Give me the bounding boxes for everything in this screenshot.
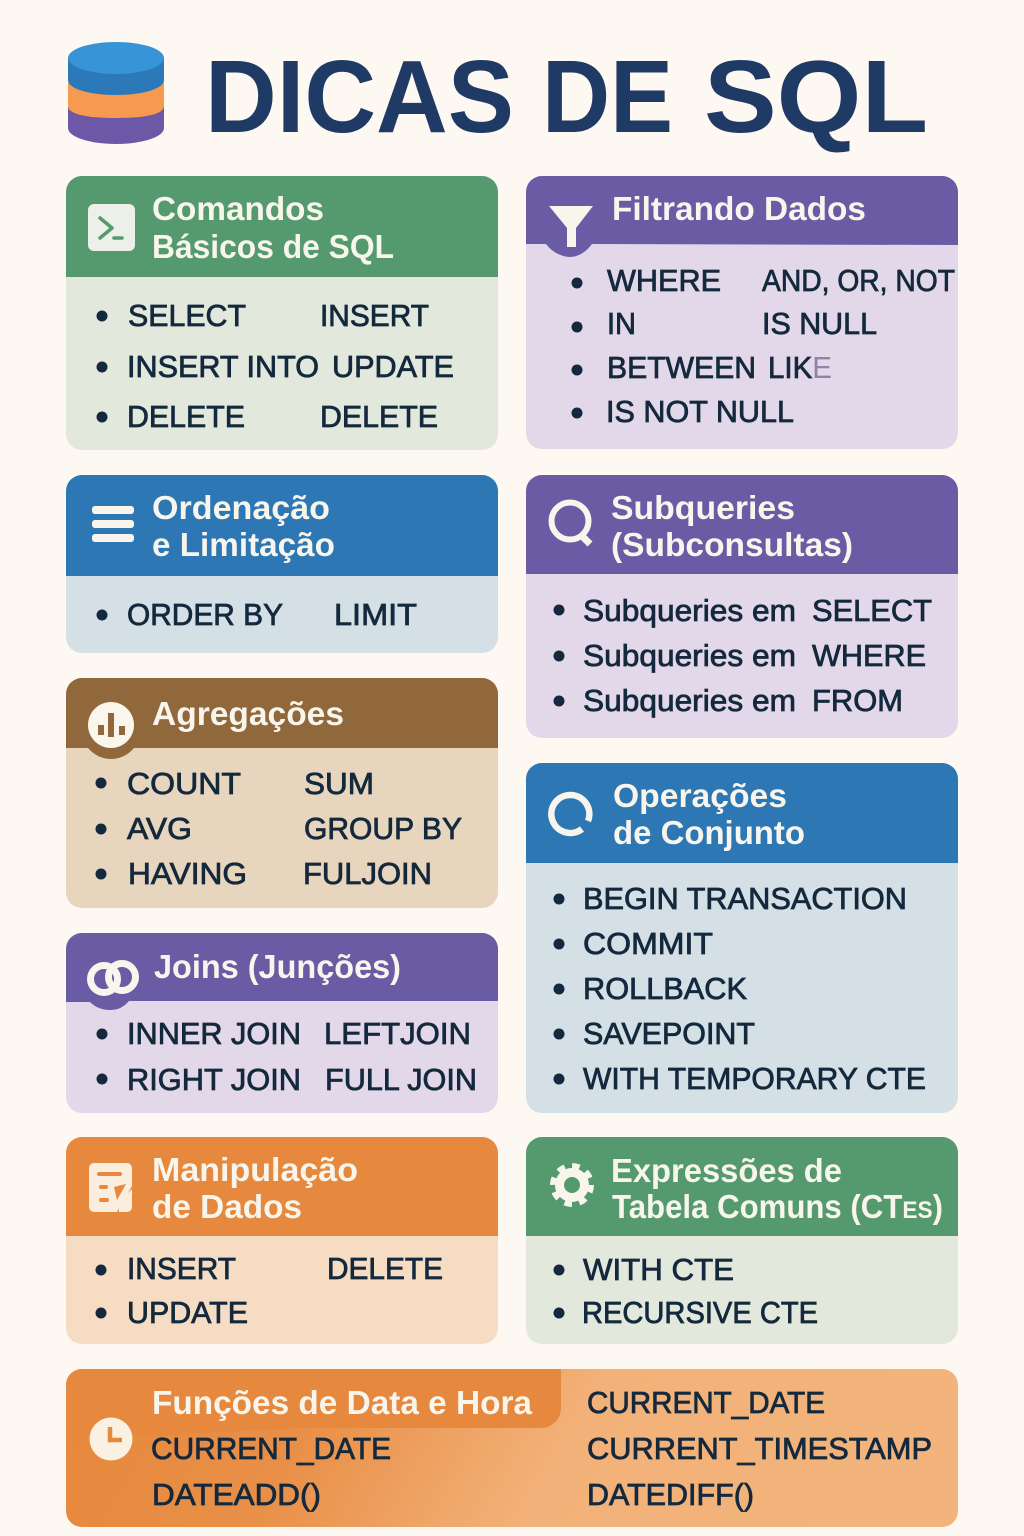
heading: subqueries: Subqueries <box>611 489 795 526</box>
list: filtros: LIKE <box>768 350 832 385</box>
panel: subqueries <box>526 475 958 738</box>
list: comandos: UPDATE <box>332 349 454 384</box>
heading: ordenação: Ordenação <box>152 489 330 526</box>
heading: agregações: Agregações <box>152 695 344 732</box>
list: funções de data: CURRENT_DATE <box>151 1431 391 1466</box>
list: agregações: HAVING <box>128 856 247 891</box>
list: subqueries: Subqueries em <box>583 683 796 718</box>
list: agregações: GROUP BY <box>304 811 462 846</box>
icon: magnifier <box>552 502 590 544</box>
heading: expressões <box>611 1152 943 1225</box>
list: comandos: DELETE <box>320 399 438 434</box>
heading: comandos <box>152 190 394 265</box>
list: comandos <box>96 298 454 434</box>
list: agregações: FULJOIN <box>303 856 432 891</box>
list: agregações <box>96 766 462 891</box>
heading: operações: de Conjunto <box>613 814 805 851</box>
panel: filtrando dados <box>526 176 958 449</box>
list: joins: INNER JOIN <box>127 1016 301 1051</box>
list: CTEs: RECURSIVE CTE <box>582 1295 818 1330</box>
icon: gear <box>553 1166 591 1204</box>
list: manipulação: DELETE <box>327 1251 443 1286</box>
list: filtros <box>572 263 955 429</box>
heading: expressões: Expressões de <box>611 1152 842 1189</box>
list: CTEs: WITH CTE <box>583 1252 734 1287</box>
list: ordenação: LIMIT <box>334 597 417 632</box>
list: manipulação: UPDATE <box>127 1295 248 1330</box>
heading: manipulação: Manipulação <box>152 1151 358 1188</box>
list: funções de data: DATEADD() <box>152 1477 321 1512</box>
list: ordenação: ORDER BY <box>127 597 283 632</box>
list: subqueries: Subqueries em <box>583 638 796 673</box>
heading: operações: Operações <box>613 777 787 814</box>
panel: operações de conjunto <box>526 763 958 1113</box>
heading: joins: Joins (Junções) <box>154 948 401 985</box>
panel: ordenação <box>66 475 498 653</box>
icon: ring <box>551 795 589 833</box>
list: subqueries: Subqueries em <box>583 593 796 628</box>
title: DE <box>542 39 673 154</box>
icon: form document <box>89 1163 132 1212</box>
list: comandos: SELECT <box>128 298 246 333</box>
icon: funnel <box>549 206 593 247</box>
list: agregações: COUNT <box>127 766 241 801</box>
icon: database cylinder <box>68 42 164 144</box>
list: transações: SAVEPOINT <box>583 1016 755 1051</box>
list: subqueries: WHERE <box>812 638 926 673</box>
panel: joins <box>66 933 498 1113</box>
icon: linked rings <box>90 964 136 992</box>
heading: manipulação <box>152 1151 358 1225</box>
list: filtros: BETWEEN <box>607 350 756 385</box>
list: filtros: IS NULL <box>762 306 877 341</box>
list: filtros: WHERE <box>607 263 721 298</box>
list: transações: BEGIN TRANSACTION <box>583 881 907 916</box>
heading: subqueries: (Subconsultas) <box>611 526 853 563</box>
list: subqueries <box>554 593 932 718</box>
list: filtros: IS NOT NULL <box>606 394 794 429</box>
list: CTEs <box>554 1252 818 1330</box>
heading: ordenação <box>152 489 335 563</box>
list: joins <box>96 1016 477 1097</box>
title <box>205 39 928 154</box>
list: joins: RIGHT JOIN <box>127 1062 301 1097</box>
heading: expressões: Tabela Comuns (CTES) <box>612 1188 943 1225</box>
panel: manipulação de dados <box>66 1137 498 1344</box>
list: funções de data: CURRENT_TIMESTAMP <box>587 1431 932 1466</box>
list: transações: COMMIT <box>583 926 713 961</box>
heading: funções: Funções de Data e Hora <box>152 1384 533 1421</box>
list: subqueries: SELECT <box>812 593 932 628</box>
icon: menu lines <box>92 506 134 542</box>
list: transações <box>554 881 926 1096</box>
panel: comandos básicos <box>66 176 498 450</box>
heading: ordenação: e Limitação <box>152 526 335 563</box>
list: filtros: IN <box>607 306 636 341</box>
list: manipulação <box>96 1251 443 1330</box>
list: comandos: INSERT <box>320 298 429 333</box>
panel: funções de data e hora <box>66 1369 958 1527</box>
list: subqueries: FROM <box>812 683 903 718</box>
heading: manipulação: de Dados <box>152 1188 302 1225</box>
panel: expressões de tabela comuns <box>526 1137 958 1344</box>
heading: operações <box>613 777 805 851</box>
title: DICAS <box>205 39 514 154</box>
list: funções de data: CURRENT_DATE <box>587 1385 825 1420</box>
list: manipulação: INSERT <box>127 1251 236 1286</box>
heading: comandos: Comandos <box>152 190 324 227</box>
title: SQL <box>704 39 928 154</box>
icon: bar chart badge <box>88 702 134 748</box>
list: joins: FULL JOIN <box>325 1062 477 1097</box>
list: funções de data: DATEDIFF() <box>587 1477 754 1512</box>
list: filtros: AND, OR, NOT <box>762 263 955 298</box>
list: agregações: SUM <box>304 766 374 801</box>
list: ordenação <box>96 597 417 632</box>
heading: comandos: Básicos de SQL <box>152 228 394 265</box>
icon: clock <box>90 1418 132 1460</box>
heading: filtrando: Filtrando Dados <box>612 190 866 227</box>
list: agregações: AVG <box>127 811 192 846</box>
list: comandos: INSERT INTO <box>127 349 319 384</box>
list: funções de data <box>151 1385 932 1512</box>
heading: subqueries <box>611 489 853 563</box>
list: transações: ROLLBACK <box>583 971 747 1006</box>
list: transações: WITH TEMPORARY CTE <box>583 1061 926 1096</box>
list: joins: LEFTJOIN <box>324 1016 471 1051</box>
list: comandos: DELETE <box>127 399 245 434</box>
icon: terminal <box>88 204 135 251</box>
panel: agregações <box>66 678 498 908</box>
